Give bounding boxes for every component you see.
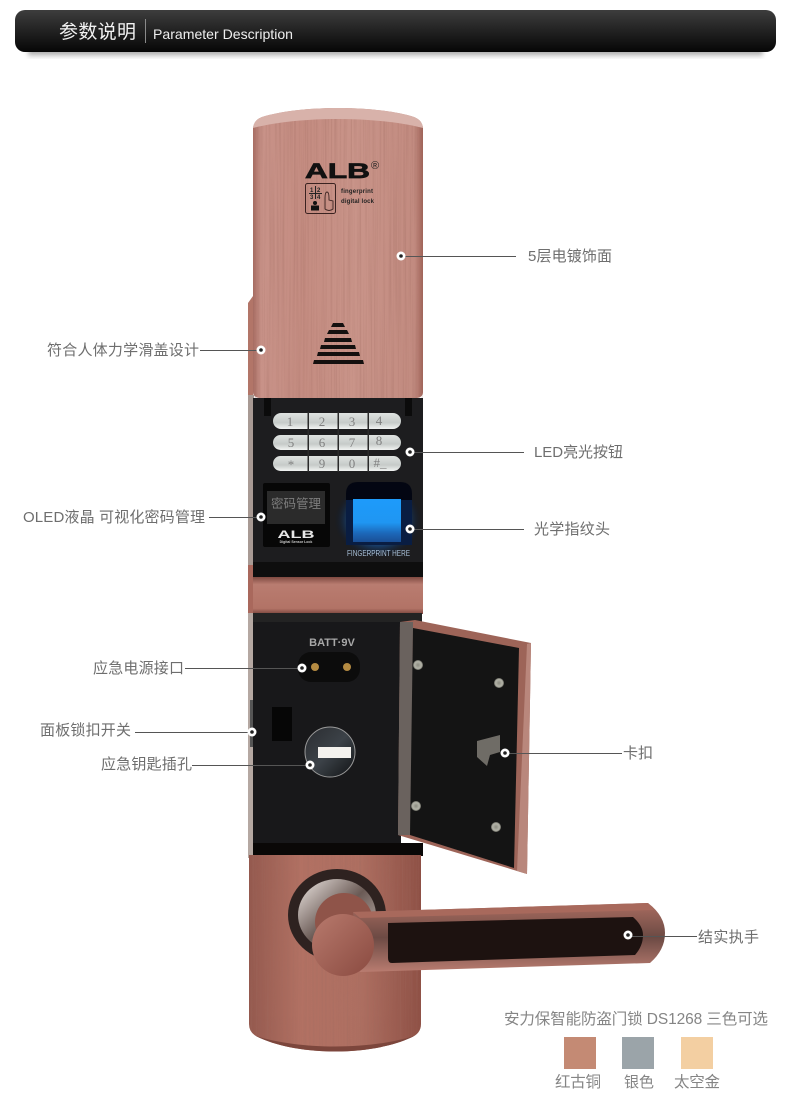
- callout: plated face: 5层电镀饰面: [528, 248, 612, 265]
- fingerprint sensor: [334, 482, 422, 558]
- callout: panel latch switch: 面板锁扣开关: [40, 721, 131, 739]
- lower escutcheon: [249, 855, 421, 1055]
- OLED display: ALB: [278, 529, 315, 541]
- keypad buttons: [273, 412, 401, 472]
- door handle: [288, 869, 665, 976]
- swatch: silver: 银色: [624, 1074, 654, 1091]
- keypad buttons: *: [288, 457, 294, 472]
- callout: sturdy handle: [624, 929, 759, 946]
- callout: catch: 卡扣: [623, 745, 653, 762]
- swatch: champagne gold: 太空金: [674, 1073, 720, 1091]
- keypad buttons: #_: [374, 455, 387, 470]
- swatch: champagne gold: [674, 1037, 720, 1091]
- logo: keypad and finger badge: 1: [310, 188, 314, 194]
- product: smart lock: [248, 108, 665, 1055]
- interior compartment: [250, 613, 423, 856]
- keypad buttons: 4: [376, 413, 383, 428]
- logo: keypad and finger badge: 3: [310, 195, 314, 201]
- callout: sturdy handle: 结实执手: [698, 929, 759, 946]
- callout: LED buttons: [406, 444, 623, 461]
- callout: emergency power port: 应急电源接口: [93, 659, 184, 677]
- sliding cover: [253, 108, 423, 400]
- callout: ergonomic sliding cover: 符合人体力学滑盖设计: [47, 342, 199, 359]
- logo: ALB: ®: [371, 160, 379, 172]
- callout: optical fingerprint sensor: [406, 521, 610, 538]
- logo: ALB: ALB: [305, 160, 370, 183]
- speaker grille: [313, 323, 364, 364]
- emergency power contacts: [298, 652, 360, 682]
- fingerprint sensor: FINGERPRINT HERE: [347, 548, 410, 558]
- OLED display: 密码管理: [271, 496, 321, 511]
- callout: emergency key hole: 应急钥匙插孔: [101, 755, 192, 773]
- callout: emergency power port: [93, 659, 306, 677]
- copper band: [253, 577, 423, 614]
- key cylinder: [305, 727, 355, 777]
- logo: keypad and finger badge: 2: [317, 188, 321, 194]
- keypad panel: [253, 398, 423, 578]
- keypad buttons: 1: [287, 414, 293, 429]
- logo: keypad and finger badge: 4: [317, 195, 321, 201]
- callout: catch: [500, 745, 653, 762]
- swatch: silver: [622, 1037, 654, 1091]
- keypad buttons: 5: [288, 435, 294, 450]
- keypad buttons: 2: [319, 414, 325, 429]
- logo: ALB: fingerprint: [341, 189, 373, 195]
- back plate strip: [248, 296, 254, 858]
- keypad buttons: 9: [319, 456, 325, 471]
- open door panel: [398, 620, 531, 874]
- OLED display: [263, 483, 330, 547]
- callout: panel latch switch: [40, 721, 256, 739]
- door screws: [411, 660, 504, 832]
- callout: optical fingerprint sensor: 光学指纹头: [534, 521, 610, 538]
- logo: ALB: [305, 160, 379, 214]
- logo: keypad and finger badge: [306, 184, 336, 214]
- callout: plated face: [396, 248, 612, 265]
- battery label: BATT·9V: [309, 637, 355, 649]
- keypad buttons: 6: [319, 435, 326, 450]
- title bar: [15, 10, 776, 58]
- OLED display: Digital Sensor Lock: [280, 540, 312, 544]
- swatch: red copper: 红古铜: [555, 1073, 601, 1091]
- door latch: [477, 735, 500, 766]
- callout: LED buttons: LED亮光按钮: [534, 444, 623, 461]
- keypad buttons: 8: [376, 433, 382, 448]
- keypad buttons: 7: [349, 435, 356, 450]
- title: Chinese heading: 参数说明: [59, 21, 136, 43]
- callout: emergency key hole: [101, 755, 314, 773]
- keypad buttons: 3: [349, 414, 355, 429]
- color options caption: 安力保智能防盗门锁 DS1268 三色可选: [504, 1010, 768, 1028]
- callout: OLED: OLED液晶 可视化密码管理: [23, 509, 205, 526]
- latch switch: [272, 707, 292, 741]
- keypad buttons: 0: [349, 456, 355, 471]
- title: English subheading: Parameter Description: [153, 26, 293, 42]
- side notches: [250, 700, 253, 747]
- swatch: red copper: [555, 1037, 601, 1091]
- logo: ALB: digital lock: [341, 199, 375, 205]
- callout: ergonomic sliding cover: [47, 342, 266, 359]
